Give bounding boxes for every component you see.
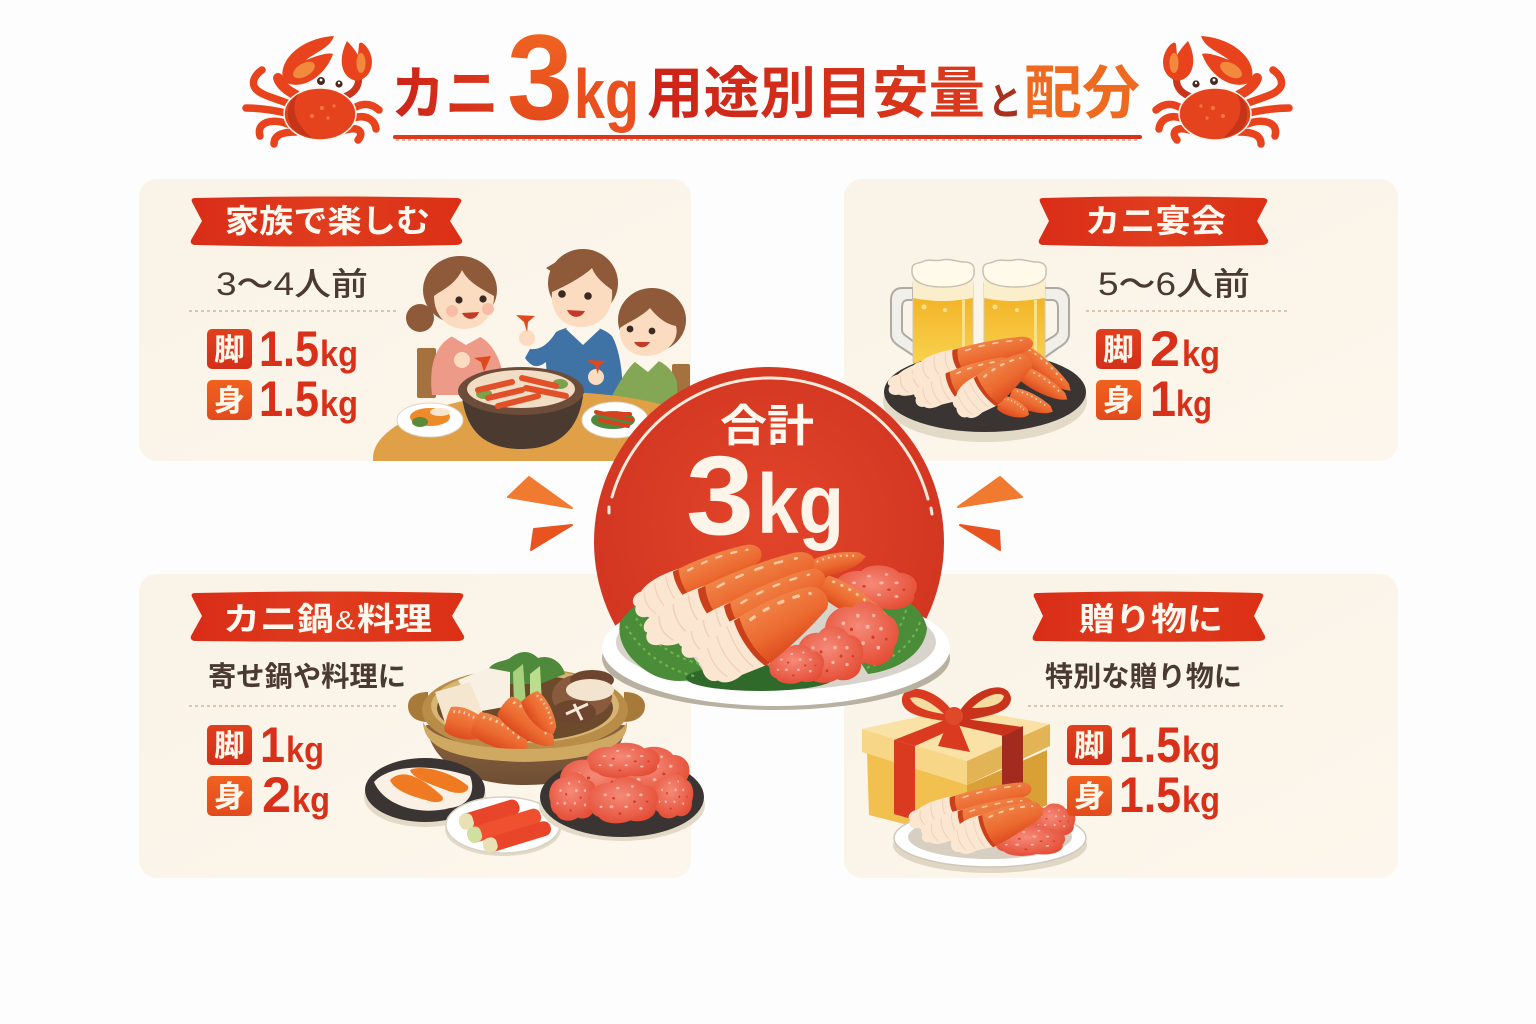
- banner: gift: 贈り物に: [1079, 601, 1223, 637]
- main crab platter: [602, 535, 950, 710]
- amounts: [1096, 321, 1220, 427]
- panel background: [844, 574, 1398, 878]
- hot pot: [458, 367, 584, 449]
- total value: [686, 433, 844, 558]
- infographic canvas: [139, 34, 1398, 878]
- banner: nabe: カニ鍋: [223, 601, 334, 637]
- illustration: left plate: [364, 758, 486, 827]
- total label: 合計: [720, 402, 814, 451]
- amounts: kg: [1182, 779, 1220, 820]
- panel: party: [844, 179, 1398, 461]
- illustration: crab meat plate: [539, 743, 705, 841]
- amounts: kg: [320, 333, 358, 374]
- burst marks right: [958, 477, 1022, 550]
- man: [516, 249, 623, 400]
- table: [373, 392, 661, 461]
- crab icon left: [246, 36, 379, 144]
- banner: nabe: [191, 592, 464, 642]
- title text: [391, 9, 1140, 145]
- back meat: [835, 565, 917, 611]
- servings: 5-6 people: 5〜6人前: [1098, 266, 1250, 302]
- title text: kg: [574, 55, 639, 133]
- title underline: [393, 135, 1142, 140]
- amounts: 身: [214, 385, 245, 418]
- amounts: kg: [286, 729, 324, 770]
- title text: 3: [507, 9, 573, 145]
- front meat: [820, 596, 903, 671]
- amounts: 1: [1150, 371, 1176, 427]
- banner: family: 家族で楽しむ: [225, 203, 430, 239]
- panel background: [139, 179, 691, 461]
- amounts: 1.5: [259, 321, 319, 377]
- amounts: kg: [1176, 383, 1212, 424]
- right plate: [582, 402, 648, 438]
- thin legs: [810, 546, 868, 579]
- illustration: family at table: [373, 249, 690, 461]
- illustration: gift plate: [893, 775, 1087, 873]
- illustration: crab plate: [883, 330, 1087, 442]
- left plate: [397, 403, 463, 437]
- banner: family: [191, 196, 462, 246]
- panel: nabe and cooking: [139, 574, 705, 878]
- amounts: [1067, 717, 1220, 823]
- inner ring: [609, 378, 932, 514]
- panel: family: [139, 179, 691, 461]
- crab icon right: [1156, 36, 1289, 144]
- amounts: 脚: [214, 730, 245, 763]
- amounts: 2: [262, 767, 291, 823]
- amounts: 身: [1103, 385, 1134, 418]
- panel: gift: [844, 574, 1398, 878]
- title text: 用途別目安量: [647, 62, 985, 125]
- amounts: 脚: [1074, 730, 1105, 763]
- title text: と: [988, 82, 1022, 124]
- amounts: [207, 321, 358, 427]
- amounts: 1.5: [259, 371, 319, 427]
- amounts: [207, 717, 330, 823]
- total value: 3: [686, 433, 754, 558]
- amounts: 1.5: [1119, 767, 1181, 823]
- amounts: 1.5: [1119, 717, 1181, 773]
- banner: gift: [1033, 592, 1265, 642]
- amounts: kg: [1182, 729, 1220, 770]
- amounts: 1: [260, 717, 285, 773]
- amounts: kg: [320, 383, 358, 424]
- usage text: 特別な贈り物に: [1045, 661, 1242, 692]
- amounts: 身: [1074, 781, 1105, 814]
- amounts: 脚: [214, 334, 245, 367]
- banner: party: [1039, 196, 1268, 246]
- total value: kg: [757, 457, 844, 551]
- panel background: [844, 179, 1398, 461]
- burst marks left: [508, 477, 572, 550]
- servings: 3-4 people: 3〜4人前: [216, 266, 368, 302]
- banner: nabe: 料理: [357, 601, 432, 637]
- panel background: [139, 574, 691, 878]
- amounts: 脚: [1103, 334, 1134, 367]
- illustration: gift box: [862, 687, 1050, 840]
- amounts: 2: [1150, 321, 1180, 377]
- title text: カニ: [391, 62, 499, 127]
- illustration: centre plate: [445, 791, 561, 859]
- title text: 配分: [1024, 61, 1140, 126]
- title block: [246, 9, 1289, 145]
- usage text: 寄せ鍋や料理に: [208, 661, 406, 692]
- amounts: kg: [1182, 333, 1220, 374]
- illustration: beer mugs: [891, 259, 1069, 364]
- banner: nabe: &: [335, 605, 355, 635]
- lettuce: [619, 597, 927, 691]
- banner: party: カニ宴会: [1085, 203, 1226, 239]
- red circle: [594, 367, 944, 626]
- boy: [587, 288, 686, 410]
- centre total badge: [594, 367, 950, 717]
- amounts: 身: [214, 781, 245, 814]
- illustration: hot pot: [408, 652, 645, 785]
- amounts: kg: [292, 779, 330, 820]
- girl: [406, 256, 505, 395]
